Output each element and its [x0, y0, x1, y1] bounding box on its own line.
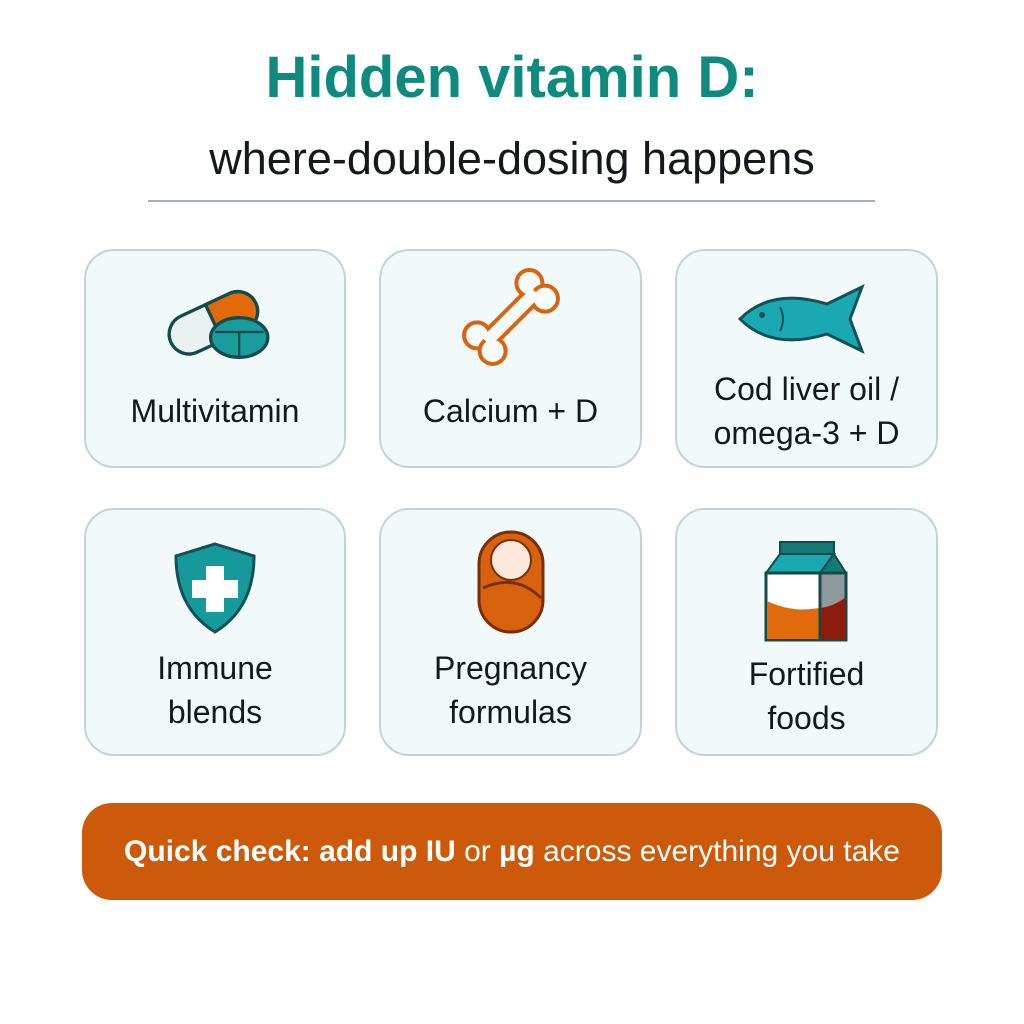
label: blends	[168, 694, 262, 730]
label: Fortified	[749, 656, 864, 692]
panel: calcium	[379, 249, 642, 468]
label	[749, 656, 864, 736]
label	[714, 371, 899, 451]
label: Pregnancy	[434, 650, 587, 686]
label	[434, 650, 587, 730]
icon: milk carton	[764, 541, 848, 642]
icon: pills	[167, 290, 270, 359]
label	[157, 650, 273, 730]
label: Cod liver oil /	[714, 371, 899, 407]
label: formulas	[449, 694, 572, 730]
panel: pregnancy	[379, 508, 642, 756]
panel: multivitamin	[84, 249, 346, 468]
icon: shield	[174, 542, 256, 634]
icon: baby	[478, 530, 544, 634]
label: Immune	[157, 650, 273, 686]
callout: quick check	[82, 803, 942, 900]
label: Multivitamin	[131, 393, 299, 429]
label: Calcium + D	[423, 393, 598, 429]
icon: bone	[462, 268, 560, 366]
label: foods	[767, 700, 846, 736]
label: omega-3 + D	[714, 415, 899, 451]
panel: immune	[84, 508, 346, 756]
title: Hidden vitamin D:	[265, 45, 759, 110]
subtitle: where-double-dosing happens	[209, 133, 815, 184]
panel: fortified foods	[675, 508, 938, 756]
panel: cod liver oil	[675, 249, 938, 468]
callout: quick check: Quick check: add up IU or µg across everything you take	[124, 835, 900, 868]
icon: fish	[738, 284, 865, 354]
